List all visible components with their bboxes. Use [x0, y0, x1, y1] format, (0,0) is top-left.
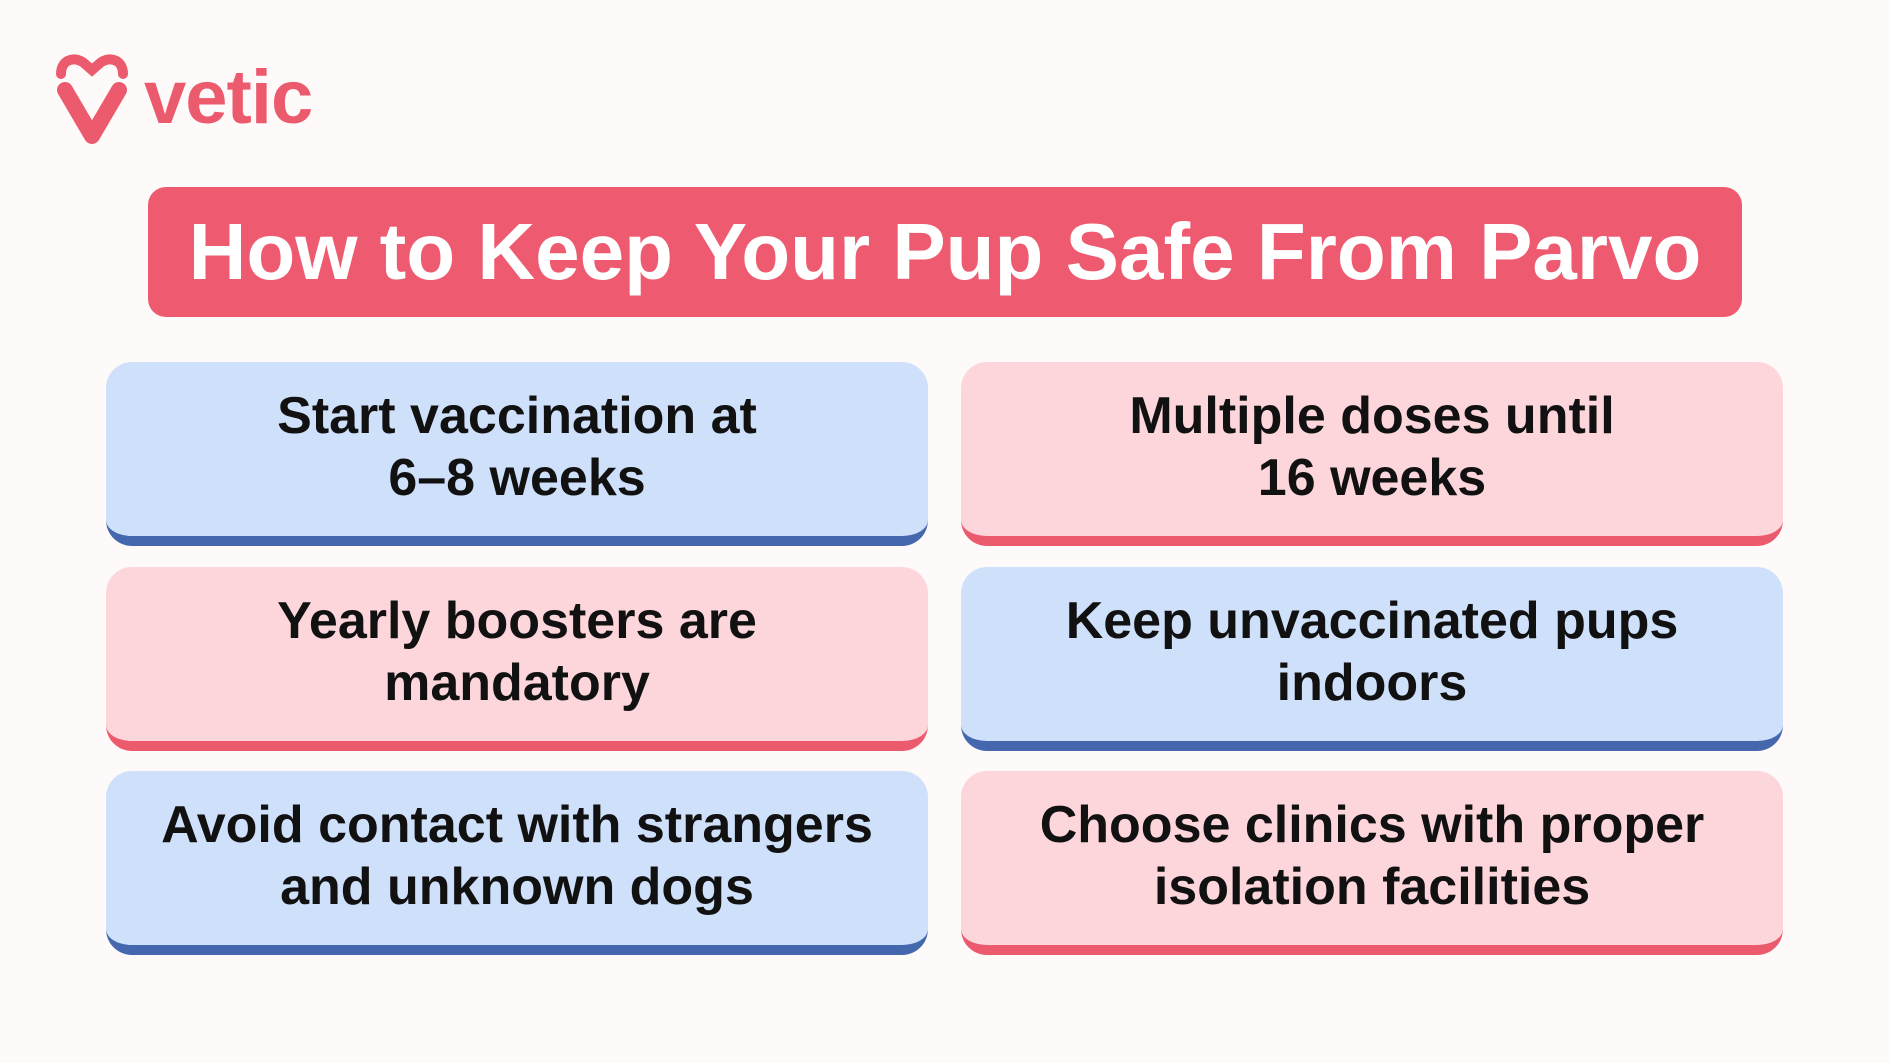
- card: yearly boosters: Yearly boosters are: [277, 592, 757, 650]
- card: choose clinics: [961, 771, 1783, 955]
- card: choose clinics: Choose clinics with proper: [1040, 796, 1704, 854]
- logo text: vetic: [144, 55, 312, 140]
- card: start vaccination: [106, 362, 928, 546]
- card: keep indoors: [961, 567, 1783, 751]
- card: start vaccination: Start vaccination at: [277, 387, 757, 445]
- card: yearly boosters: [106, 567, 928, 751]
- card: choose clinics: isolation facilities: [1154, 858, 1590, 916]
- title banner: [148, 187, 1742, 317]
- card: start vaccination: 6–8 weeks: [388, 449, 646, 507]
- card: avoid contact: [106, 771, 928, 955]
- card: avoid contact: and unknown dogs: [280, 858, 754, 916]
- title banner: How to Keep Your Pup Safe From Parvo: [189, 207, 1701, 296]
- card: keep indoors: indoors: [1277, 654, 1467, 712]
- card: avoid contact: Avoid contact with strangers: [161, 796, 873, 854]
- card: yearly boosters: mandatory: [384, 654, 650, 712]
- card: keep indoors: Keep unvaccinated pups: [1066, 592, 1678, 650]
- card: multiple doses: Multiple doses until: [1129, 387, 1615, 445]
- card: multiple doses: 16 weeks: [1258, 449, 1486, 507]
- card: multiple doses: [961, 362, 1783, 546]
- icon: heart V: [56, 54, 128, 144]
- logo: [56, 54, 312, 144]
